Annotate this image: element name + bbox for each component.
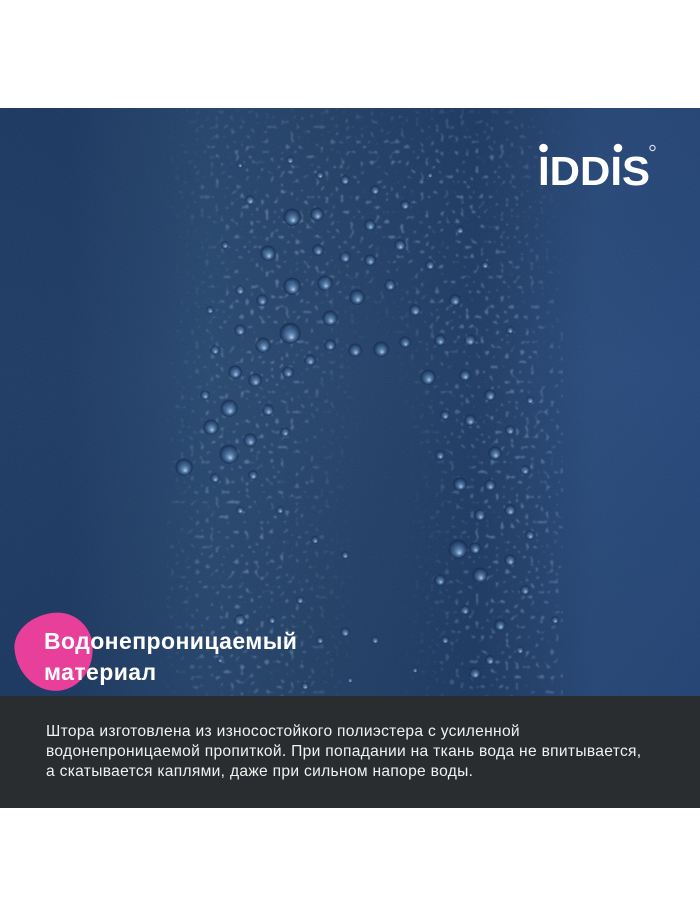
description text: а скатывается каплями, даже при сильном напоре воды.	[46, 763, 473, 780]
pink blob accent	[11, 609, 97, 695]
tiny droplets	[168, 108, 563, 696]
heading	[44, 628, 297, 685]
photo: blue fabric with water droplets	[0, 108, 700, 696]
large droplets	[175, 156, 559, 690]
logo: IDDIS: IDDIS	[538, 148, 650, 194]
description panel	[0, 696, 700, 808]
fabric background	[0, 108, 700, 696]
description text: Штора изготовлена из износостойкого полиэстера с усиленной	[46, 723, 520, 740]
description text: водонепроницаемой пропиткой. При попадании на ткань вода не впитывается,	[46, 743, 641, 760]
heading: материал	[44, 659, 157, 685]
description text	[46, 723, 641, 780]
heading: Водонепроницаемый	[44, 628, 297, 654]
